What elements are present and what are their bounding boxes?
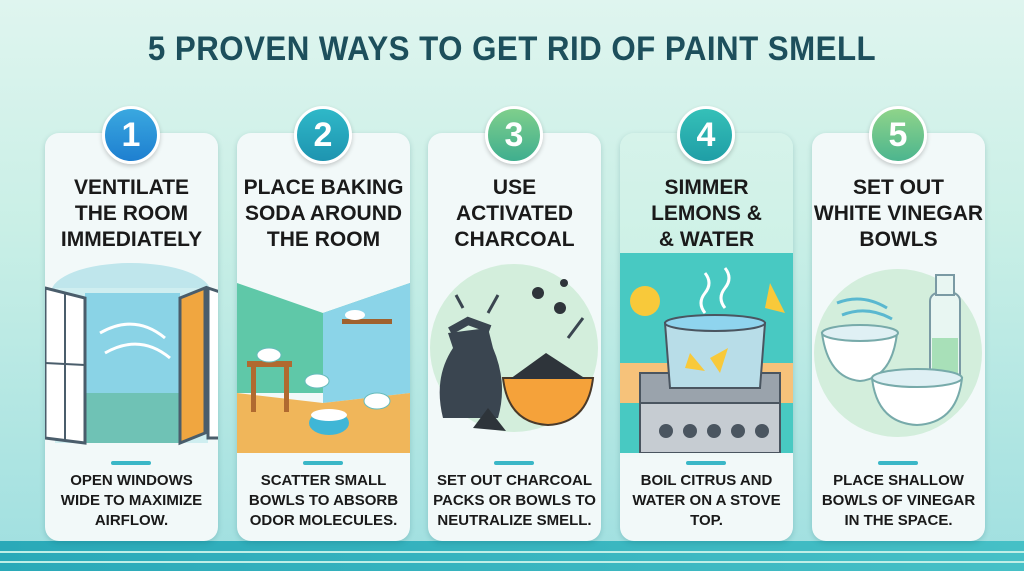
description 1: OPEN WINDOWS xyxy=(70,472,193,489)
description 3: SET OUT CHARCOAL xyxy=(437,472,592,489)
description 5: IN THE SPACE. xyxy=(844,512,953,529)
panel: charcoal xyxy=(428,133,601,541)
illustration: pot on stove xyxy=(620,253,793,453)
description 4 xyxy=(632,472,781,529)
description 3 xyxy=(433,472,596,529)
description 5 xyxy=(822,472,975,529)
number badge 2: 2 xyxy=(314,116,332,154)
description 4: BOIL CITRUS AND xyxy=(641,472,772,489)
description 1 xyxy=(60,472,202,529)
heading 4: SIMMER xyxy=(664,176,748,199)
description 4: WATER ON A STOVE xyxy=(632,492,781,509)
title: 5 PROVEN WAYS TO GET RID OF PAINT SMELL xyxy=(148,30,876,68)
heading 4 xyxy=(651,176,762,251)
description 3: PACKS OR BOWLS TO xyxy=(433,492,596,509)
illustration: open window xyxy=(45,263,218,446)
description 4: TOP. xyxy=(690,512,723,529)
description 2: SCATTER SMALL xyxy=(261,472,386,489)
number badge 4: 4 xyxy=(697,116,715,154)
number badge 1 xyxy=(102,106,160,164)
description 5: BOWLS OF VINEGAR xyxy=(822,492,975,509)
description 2: ODOR MOLECULES. xyxy=(250,512,397,529)
description 1: AIRFLOW. xyxy=(95,512,168,529)
number badge 1: 1 xyxy=(122,116,140,154)
panel: lemons xyxy=(620,133,793,541)
description 2 xyxy=(249,472,398,529)
panel: vinegar xyxy=(812,133,985,541)
heading 5: BOWLS xyxy=(859,228,938,251)
heading 2: PLACE BAKING xyxy=(244,176,403,199)
panel: baking soda xyxy=(237,133,410,541)
heading 1: IMMEDIATELY xyxy=(61,228,202,251)
description 2: BOWLS TO ABSORB xyxy=(249,492,398,509)
illustration: charcoal bag and bowl xyxy=(430,264,598,432)
number badge 4 xyxy=(677,106,735,164)
panel: ventilate xyxy=(45,133,218,541)
description 3: NEUTRALIZE SMELL. xyxy=(437,512,592,529)
heading 5: WHITE VINEGAR xyxy=(814,202,983,225)
heading 3: USE xyxy=(493,176,536,199)
heading 1 xyxy=(61,176,202,251)
illustration: vinegar bowls xyxy=(814,269,982,437)
illustration: room with bowls xyxy=(237,283,410,453)
heading 2 xyxy=(244,176,403,251)
heading 2: SODA AROUND xyxy=(245,202,402,225)
number badge 5 xyxy=(869,106,927,164)
number badge 3 xyxy=(485,106,543,164)
number badge 5: 5 xyxy=(889,116,907,154)
heading 2: THE ROOM xyxy=(267,228,380,251)
heading 5: SET OUT xyxy=(853,176,944,199)
heading 1: THE ROOM xyxy=(75,202,188,225)
number badge 3: 3 xyxy=(505,116,523,154)
description 5: PLACE SHALLOW xyxy=(833,472,964,489)
description 1: WIDE TO MAXIMIZE xyxy=(61,492,202,509)
heading 4: LEMONS & xyxy=(651,202,762,225)
bottom band xyxy=(0,541,1024,571)
heading 3 xyxy=(454,176,575,251)
number badge 2 xyxy=(294,106,352,164)
heading 1: VENTILATE xyxy=(74,176,189,199)
heading 4: & WATER xyxy=(659,228,754,251)
heading 5 xyxy=(814,176,983,251)
heading 3: CHARCOAL xyxy=(454,228,575,251)
heading 3: ACTIVATED xyxy=(456,202,573,225)
